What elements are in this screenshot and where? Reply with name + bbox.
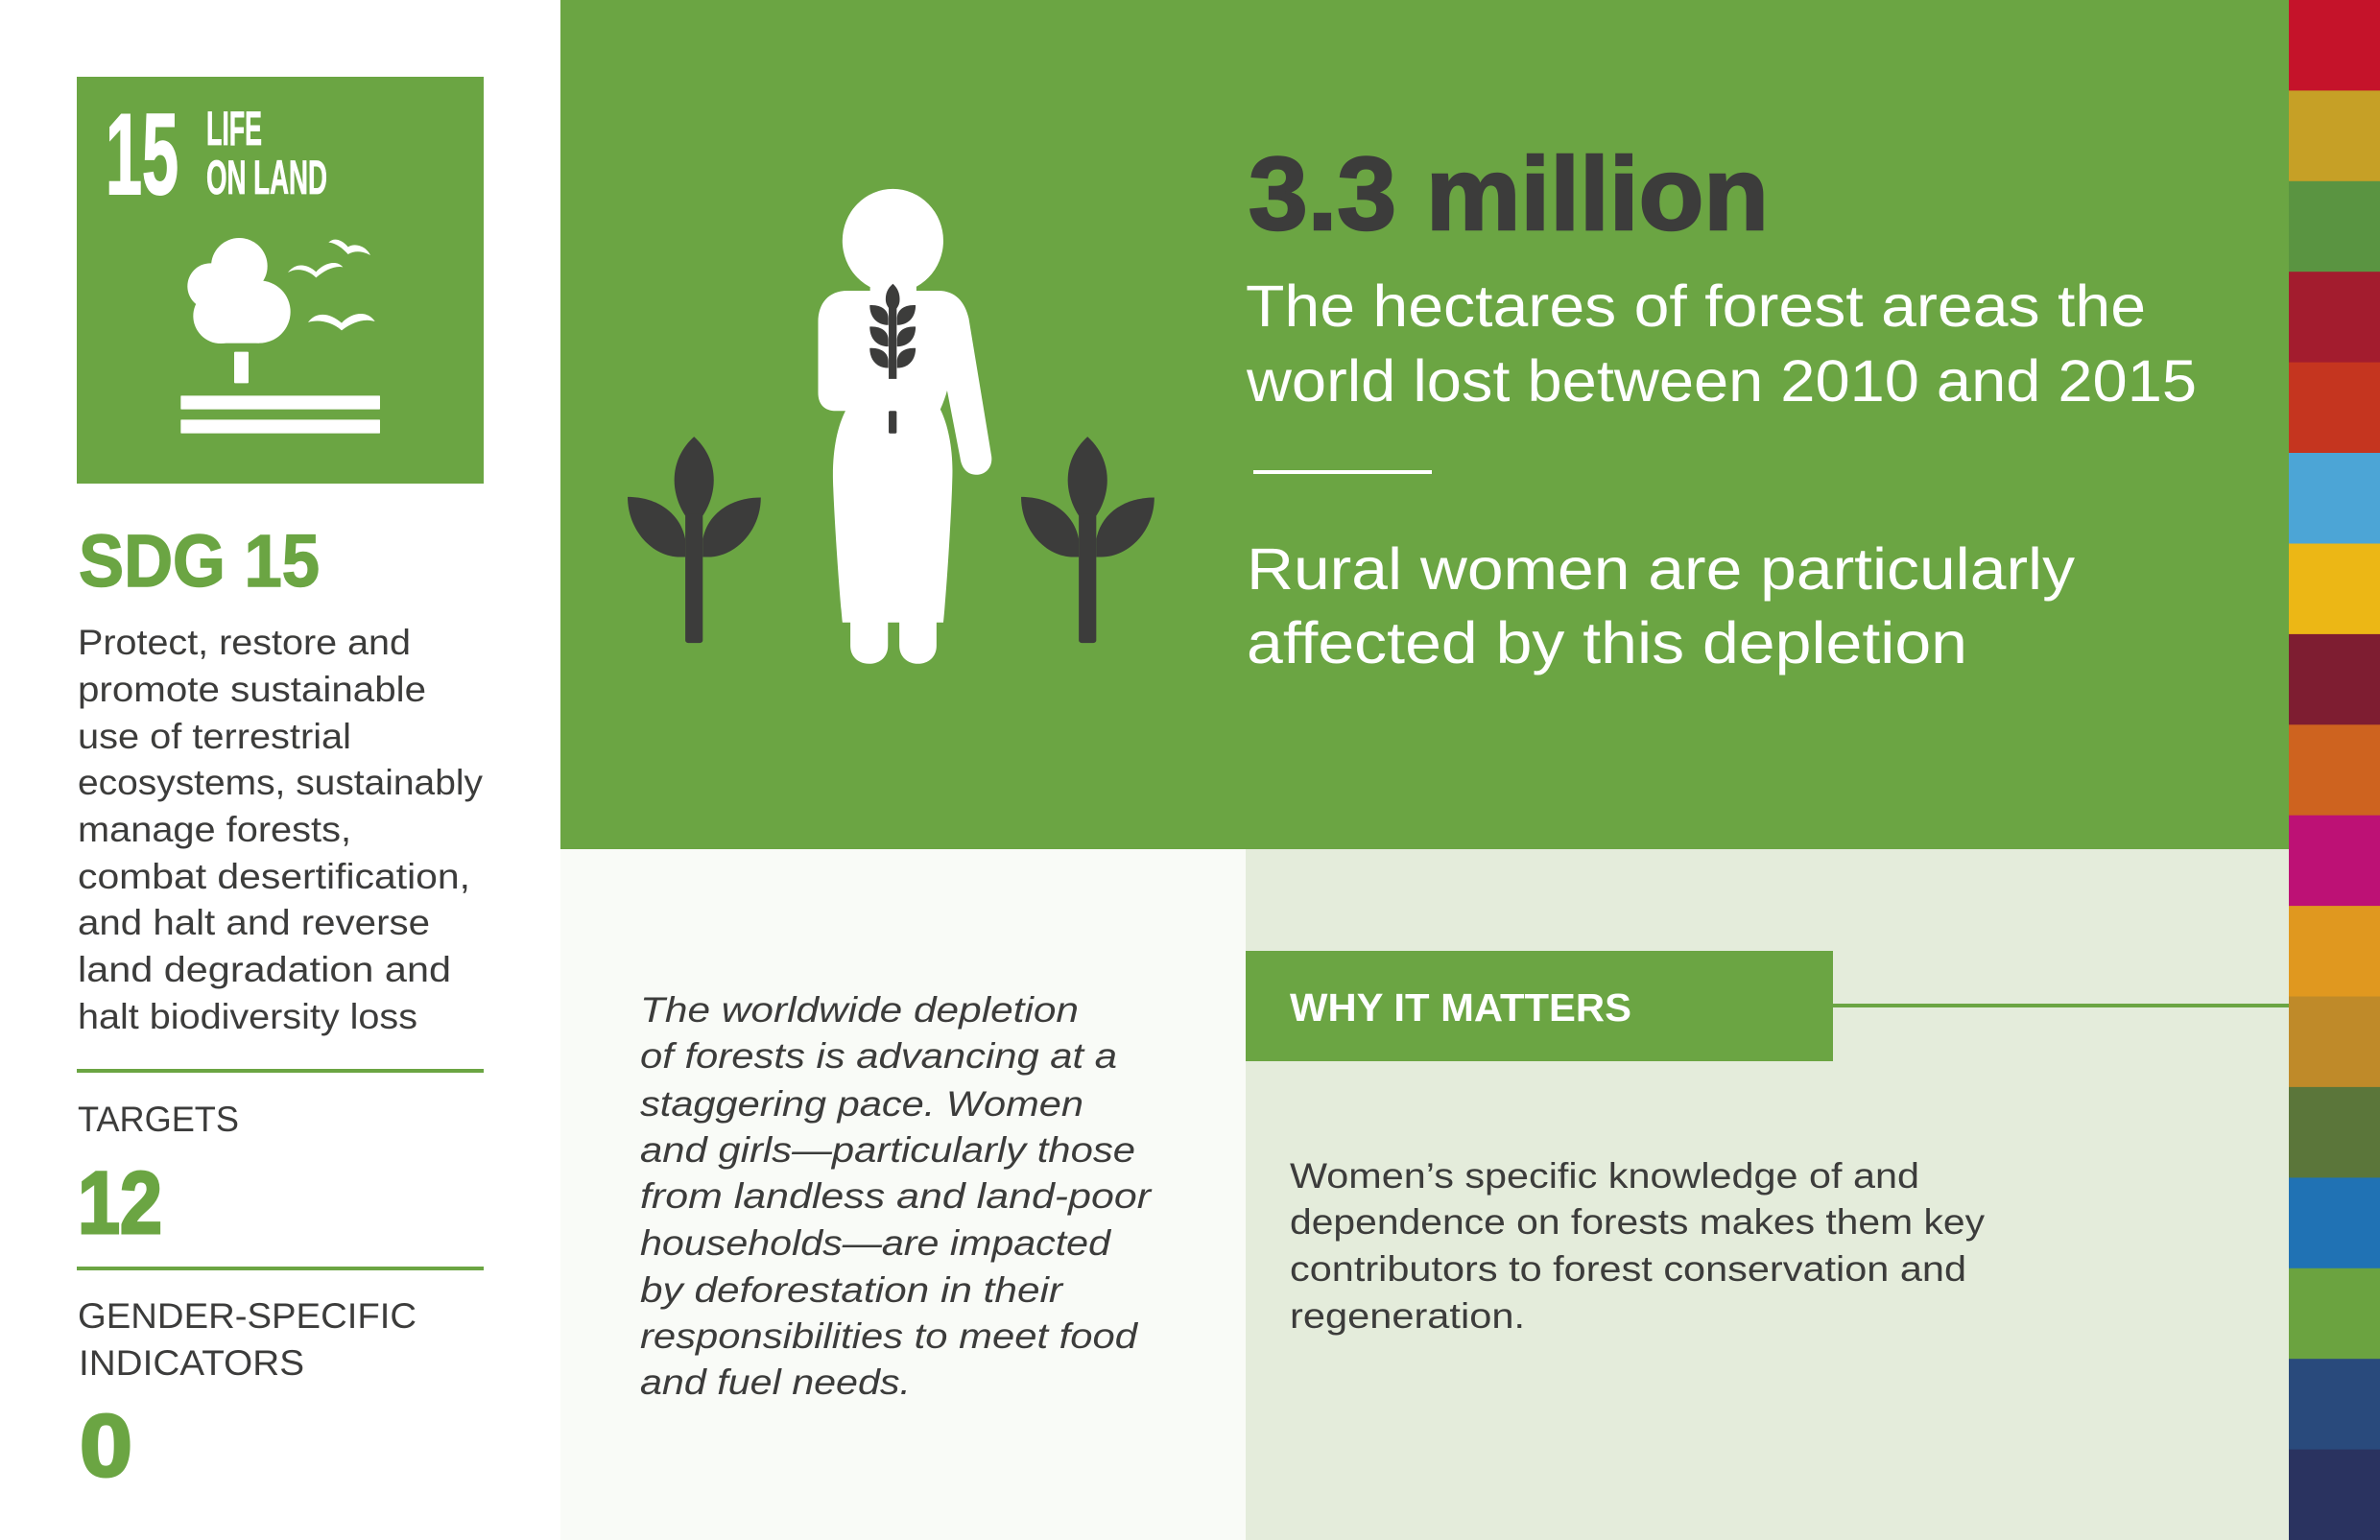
label: gender-specific indicators [78,1296,416,1383]
goal name: ON LAND [206,151,327,204]
text block: italic statement: by deforestation in their [640,1270,1064,1310]
panel: italic quote background [560,849,1246,1540]
panel: top green banner [560,0,2289,849]
text block: why it matters body: regeneration. [1290,1296,1525,1336]
icon: woman [818,189,991,664]
panel: SDG colour stripe [2289,0,2380,1540]
goal name: LIFE [206,102,262,155]
text block: goal description [78,623,484,1036]
text block: why it matters body [1290,1156,1986,1336]
text block: why it matters body: dependence on forests makes them key [1290,1202,1986,1242]
label: targets: TARGETS [78,1100,239,1139]
heading: why it matters [1246,951,2289,1061]
text block: italic statement: of forests is advancing at a [640,1036,1117,1076]
text block: goal description: use of terrestrial [78,717,351,756]
text block: italic statement: responsibilities to meet food [640,1316,1139,1356]
icon: left plant [628,437,761,643]
label: gender-specific indicators: GENDER-SPECIFIC [78,1296,416,1336]
text block: goal description: halt biodiversity loss [78,997,417,1036]
panel: why it matters background [1246,849,2289,1540]
icon: woman holding grain between two plants [628,189,1154,664]
text block: goal description: ecosystems, sustainably [78,763,484,802]
text block: goal description: land degradation and [78,950,451,989]
text block: goal description: combat desertification, [78,857,470,896]
label: gender-specific indicators: INDICATORS [79,1343,304,1383]
text block: italic statement: The worldwide depletion [640,990,1079,1030]
text block: italic statement: from landless and land-poor [640,1176,1153,1216]
text block: rural women: affected by this depletion [1247,610,1967,675]
text block: statistic description: world lost between 2010 and 2015 [1246,348,2197,414]
text block: why it matters body: Women’s specific knowledge of and [1290,1156,1919,1196]
text block: statistic description [1246,273,2197,414]
text block: goal description: promote sustainable [78,670,426,709]
headline statistic: 3.3 million [1249,135,1769,251]
icon: tree and birds [180,238,380,434]
text block: italic statement: households—are impacted [640,1223,1112,1263]
icon: grain stalk [869,284,916,434]
text block: italic statement: staggering pace. Women [640,1084,1083,1124]
heading: SDG 15: SDG 15 [79,520,320,603]
number: targets count: 12 [78,1154,162,1252]
text block: rural women: Rural women are particularly [1247,536,2076,602]
panel: SDG 15 icon tile [77,77,484,484]
text block: rural women [1247,536,2076,675]
text block: statistic description: The hectares of forest areas the [1246,273,2146,339]
goal number: 15 [106,90,178,219]
text block: italic statement: and fuel needs. [640,1362,911,1402]
goal name [206,102,327,204]
icon: right plant [1021,437,1154,643]
text block: goal description: manage forests, [78,810,351,849]
number: gender-specific indicators count: 0 [80,1397,132,1495]
text block: goal description: Protect, restore and [78,623,411,662]
text block: italic statement [640,990,1153,1402]
text block: italic statement: and girls—particularly those [640,1130,1135,1170]
text block: goal description: and halt and reverse [78,903,430,942]
heading: why it matters: WHY IT MATTERS [1290,985,1631,1030]
text block: why it matters body: contributors to forest conservation and [1290,1249,1966,1289]
